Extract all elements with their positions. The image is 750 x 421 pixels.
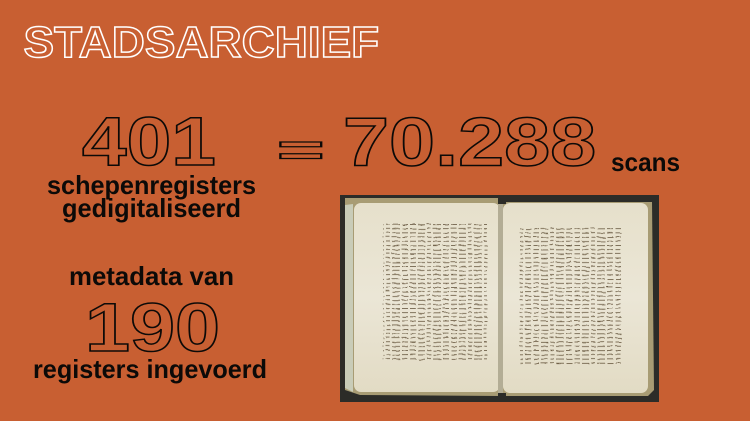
label: metadata van: metadata van: [69, 261, 234, 291]
right page: [503, 202, 654, 396]
stat: 401: 401: [82, 102, 216, 180]
label: schepenregisters gedigitaliseerd: schepenregisters: [47, 170, 256, 200]
stat: 190: 190: [85, 289, 220, 366]
photo: open manuscript register: [340, 195, 659, 402]
label: registers ingevoerd: registers ingevoerd: [33, 354, 267, 384]
label: scans: scans: [611, 147, 680, 177]
left page: [345, 198, 500, 396]
book spine: [498, 196, 506, 401]
label: schepenregisters gedigitaliseerd: gedigitaliseerd: [62, 193, 241, 223]
title: STADSARCHIEF: [24, 17, 379, 67]
book cover: [340, 195, 659, 402]
label: schepenregisters gedigitaliseerd: [47, 170, 256, 223]
stat: 70.288: 70.288: [343, 104, 596, 181]
equals sign: =: [277, 125, 325, 174]
